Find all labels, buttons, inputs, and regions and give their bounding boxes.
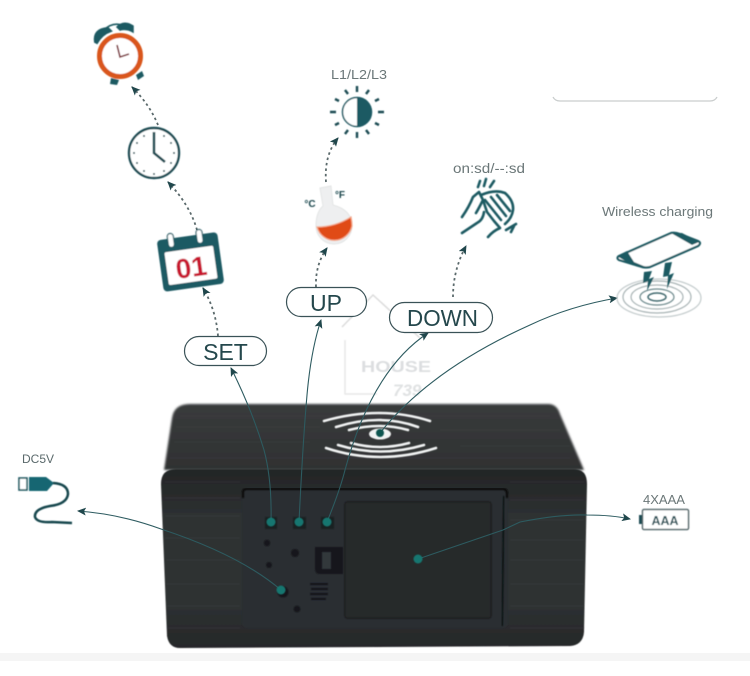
buttons and holes bbox=[264, 517, 343, 612]
icon: calendar bbox=[156, 227, 224, 292]
icon: half sun bbox=[330, 86, 384, 138]
battery cover bbox=[345, 502, 491, 618]
pill: DOWN: DOWN bbox=[407, 305, 478, 331]
dashed: down to hands bbox=[453, 246, 466, 297]
icon: calendar: 01 bbox=[174, 250, 209, 285]
icon: alarm clock bbox=[95, 23, 144, 85]
watermark: house 739: HOUSE bbox=[361, 359, 431, 376]
label: wireless charging: Wireless charging bbox=[602, 204, 713, 219]
icon: phone on charging pad bbox=[617, 233, 701, 317]
dashed: set to calendar bbox=[203, 288, 218, 336]
pill: UP: UP bbox=[310, 290, 342, 316]
device wood grain front bbox=[165, 482, 584, 628]
icon: usb cable bbox=[19, 477, 72, 523]
line: wireless charging bbox=[380, 298, 617, 433]
label: on:sd: on:sd/--:sd bbox=[453, 161, 525, 176]
pill: UP bbox=[286, 288, 366, 316]
leader lines bbox=[78, 298, 630, 590]
icon: clapping hands bbox=[462, 179, 516, 237]
dashed arrows bbox=[132, 87, 466, 336]
pill: SET bbox=[184, 336, 266, 366]
dashed: calendar to clock bbox=[168, 182, 197, 230]
clock device bbox=[161, 404, 587, 648]
leader dots bbox=[266, 429, 422, 594]
watermark: house 739 bbox=[342, 295, 431, 400]
dashed: up to flask bbox=[316, 248, 327, 287]
wireless charging logo bbox=[324, 413, 436, 457]
dashed: flask to sun bbox=[326, 138, 338, 182]
line: set bbox=[231, 368, 271, 522]
icon: wall clock bbox=[129, 128, 179, 178]
decorative top right line bbox=[553, 97, 717, 101]
icon: AAA battery: AAA bbox=[651, 514, 679, 528]
device front face bbox=[161, 469, 587, 648]
label: 4XAAA: 4XAAA bbox=[643, 493, 686, 507]
icon: flask temperature: °F bbox=[335, 190, 345, 201]
line: power port bbox=[78, 511, 281, 590]
line: battery bbox=[418, 515, 630, 559]
dashed: clock to alarm bbox=[132, 87, 158, 125]
device top face bbox=[164, 404, 584, 470]
pill: SET: SET bbox=[203, 339, 248, 365]
watermark: house 739: 739 bbox=[393, 381, 422, 400]
back panel bbox=[242, 488, 508, 628]
device wood grain top bbox=[170, 416, 570, 458]
label: DC5V: DC5V bbox=[22, 452, 54, 466]
line: up bbox=[299, 320, 321, 522]
pill: DOWN bbox=[390, 302, 492, 332]
label: L1/L2/L3: L1/L2/L3 bbox=[331, 67, 387, 82]
icon: flask temperature: °C bbox=[304, 199, 316, 210]
icon: flask temperature bbox=[304, 186, 352, 244]
icon: AAA battery bbox=[639, 510, 688, 530]
line: down bbox=[327, 333, 428, 522]
